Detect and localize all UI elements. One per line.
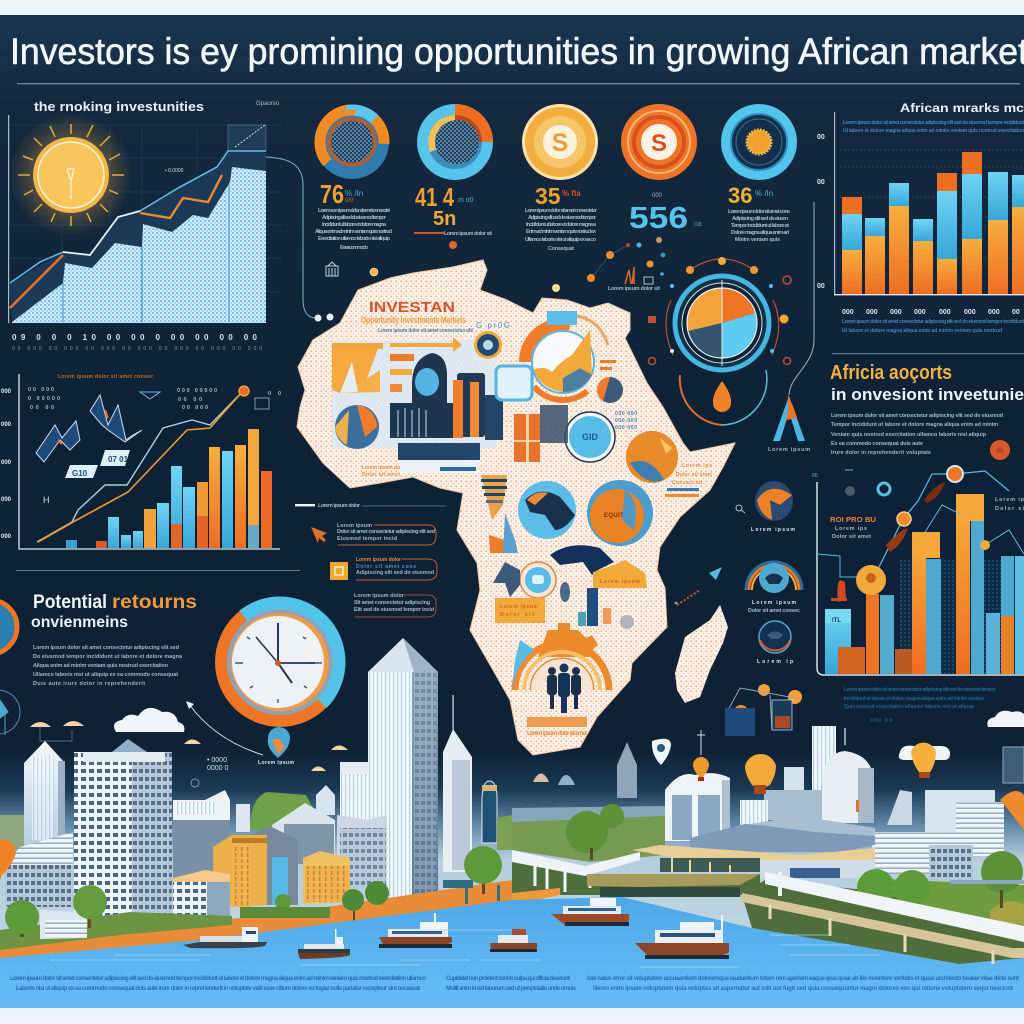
cross mark (697, 730, 705, 755)
icon: striped sphere (755, 481, 793, 521)
orange footer bars: Lorem ipsum dolor sit amet (527, 731, 587, 737)
ships (50, 898, 880, 967)
orange note: Dolor sit (500, 612, 534, 618)
panel: chart with growth bars: 00 00 (30, 405, 54, 411)
stat 556: 556 (629, 200, 688, 235)
stat 76: 76 (320, 179, 344, 209)
panel: donut stats: Consequat (548, 246, 574, 252)
list item 1: Lorem ipsum (337, 523, 372, 529)
panel: donut stats: Lorem ipsum dolor sit amet consectetur (525, 208, 598, 214)
orange arrow box: Lorem ipsum (600, 579, 641, 585)
tower a (24, 741, 65, 845)
hanging bulbs frame (725, 688, 795, 736)
panel: donut stats: % /In (345, 189, 363, 198)
orange world globe (587, 480, 653, 546)
orange note: Lorem ipsum (500, 604, 539, 610)
left bridge (512, 850, 760, 905)
glowing dot (370, 268, 378, 276)
orange arrow box (593, 560, 647, 588)
panel: donut stats: Adipiscing elit sed do eiusmod tempor (322, 215, 387, 221)
orange globe (626, 431, 678, 483)
list item 3: Elit sed do eiusmod tempor incid (354, 607, 434, 613)
text note east: 000 000 (615, 418, 637, 424)
list item 3: Sit amet consectetur adipiscing (354, 600, 430, 606)
list panel: Lorem ipsum dolor (318, 503, 361, 509)
small tower (316, 785, 335, 815)
continent (297, 260, 735, 755)
ship 5 (551, 898, 629, 926)
text note east: 000 000 (615, 411, 637, 417)
trend lines (10, 252, 63, 283)
domes (533, 774, 575, 785)
panel: donut stats: Lorem ipsum dolor sit amet cons (728, 209, 790, 215)
badge GID (565, 412, 615, 462)
panel: donut stats (307, 97, 797, 252)
column of small icons: Lorem ipsum (751, 527, 796, 533)
cloud left (114, 708, 184, 732)
list item 2 (330, 557, 437, 580)
tag labels: 07 01 (108, 455, 129, 464)
panel: chart with growth bars: 000 (1, 460, 12, 466)
footer text: Lorem ipsum dolor sit amet consectetur adipiscing elit sed do eiusmod tempor incididunt ut labore et dolore magna aliqua enim ad minim veniam quis nostrud exercitation ullamco (10, 976, 426, 982)
infographic canvas: Lorem ipsum (258, 760, 295, 766)
trees (566, 804, 624, 860)
icon: clipped ring (0, 600, 17, 654)
text block: Quis nostrud exercitation ullamco laboris nisi ut aliquip (844, 704, 974, 710)
panel: donut stats: 5n (433, 208, 456, 230)
panel: donut stats: % /In (755, 189, 773, 198)
ship 2 (298, 929, 350, 959)
cloud right (987, 711, 1024, 727)
panel: African markets bar chart: 00 (817, 179, 825, 186)
panel: donut stats: Lorem ipsum dolor sit (444, 231, 492, 237)
illustration: skyline silhouette (390, 403, 460, 438)
list item 2: Adipiscing elit sed do eiusmod (356, 570, 434, 576)
panel: African markets bar chart: Lorem ipsum dolor sit amet consectetur adipiscing elit sed do eiusmod tempor incididunt (842, 319, 1024, 325)
pennant (489, 513, 518, 553)
small label (191, 757, 229, 787)
footer text: Mollit anim id est laborum sed ut perspiciatis unde omnis (446, 986, 577, 992)
coin 4 (621, 104, 697, 180)
icon: globe small at right of map (736, 505, 745, 513)
low block left (5, 832, 73, 907)
side block (337, 762, 387, 888)
dark wedge (10, 151, 266, 322)
bars (842, 152, 1024, 294)
panel: chart with growth bars: 00 (268, 391, 281, 397)
Africa map: Opportunity Investments Markets (361, 315, 466, 325)
Africa map: Lorem ipsum do (362, 465, 400, 471)
icon: sun (9, 113, 133, 237)
panel: African markets bar chart: 000 (914, 309, 926, 316)
text block (844, 687, 996, 724)
text block: Lorem ipsum dolor sit amet consectetur adipiscing elit sed do eiusmod tempor (844, 687, 996, 693)
panel: chart with growth bars: 00 000 (28, 387, 54, 393)
rainbow with people (512, 623, 609, 713)
arrow head (186, 701, 194, 709)
panel: Africa reports text: 00 (997, 449, 1004, 455)
panel: African markets bar chart (817, 101, 1024, 334)
panel: African markets bar chart: 000 (842, 309, 854, 316)
scattered node dots: Lorem ipsum dolor sit (608, 286, 660, 292)
small pins (30, 721, 348, 771)
panel: African markets bar chart: 000 (890, 309, 902, 316)
drop icon (713, 381, 731, 412)
panel: donut stats: 0/0 (345, 198, 354, 204)
Africa map: Dolor sit amet (362, 472, 400, 478)
footer text: Laboris nisi ut aliquip ex ea commodo consequat duis aute irure dolor in reprehenderit in voluptate velit esse cillum dolore eu fugiat nulla pariatur excepteur sint occaecat (16, 986, 420, 992)
ring chart (509, 308, 617, 416)
list panel (295, 503, 446, 617)
blue block (252, 826, 298, 905)
ramp (742, 872, 1024, 964)
spire tower (443, 695, 472, 872)
panel: chart with growth bars: 000 (1, 534, 12, 540)
panel: donut stats: Incididunt ut labore et dolore magna (322, 222, 387, 228)
panel: chart with growth bars (1, 374, 281, 549)
panel: African markets bar chart: 000 (988, 309, 1000, 316)
panel: return bars framed chart: Lorem ip (995, 497, 1024, 503)
stat 556: oa (694, 221, 702, 228)
heading: Potential (33, 592, 107, 613)
pie (687, 280, 757, 366)
panel: return bars framed chart: 00 (812, 473, 818, 479)
footer text: Cupidatat non proident sunt in culpa qui officia deserunt (446, 976, 570, 982)
stat 41 4: 41 4 (415, 182, 454, 212)
ship 1 (183, 927, 267, 948)
network glyphs (36, 421, 80, 462)
panel: African markets bar chart: 000 (866, 309, 878, 316)
shield pin (652, 739, 671, 765)
dotted area (12, 167, 266, 323)
panel: chart with growth bars: 000 00000 (177, 388, 217, 394)
mini city (560, 582, 634, 629)
far right block (1003, 747, 1024, 783)
ship 6 (635, 915, 729, 959)
icon: small dots arrow (675, 567, 722, 605)
panel: donut stats: % fIa (562, 189, 581, 198)
panel: chart with growth bars: 00 000 (182, 405, 208, 411)
panel: Africa reports text: in onvesiont inveetunie (831, 385, 1024, 404)
panel: African markets bar chart: Lorem ipsum dolor sit amet consectetur adipiscing elit sed do eiusmod tempor incididunt (843, 120, 1024, 126)
green hill (250, 792, 325, 830)
panel: donut stats: Dolore magna aliqua enim ad (731, 230, 789, 236)
capsule icon (597, 377, 623, 403)
axis (19, 374, 280, 549)
icon: dark circle (759, 621, 791, 653)
text block: Incididunt ut labore et dolore magna aliqua enim ad minim veniam (844, 696, 985, 702)
text note far east (665, 463, 712, 497)
panel: potential returns: Ullamco laboris nisi ut aliquip ex ea commodo consequat (33, 672, 178, 678)
chart title: African mrarks mc (900, 101, 1024, 115)
ship 3 (379, 913, 452, 948)
grey block (272, 803, 335, 864)
coin 4: S (651, 130, 667, 157)
icon: camera ring (474, 331, 502, 359)
lower arc (680, 375, 722, 425)
station roofs (632, 816, 875, 878)
list item 1 (311, 523, 436, 545)
panel: donut stats: Adipiscing elit sed do eiusmod tempor (528, 215, 597, 221)
column of small icons (746, 481, 802, 665)
land (0, 880, 512, 960)
panel: donut stats: Adipiscing elit sed do eiusm (732, 216, 788, 222)
column of small icons: Lorem ip (757, 659, 793, 665)
dark blob (550, 545, 614, 575)
small label: • 0000 (207, 757, 227, 764)
scattered node dots (552, 237, 666, 292)
white building (665, 773, 730, 841)
orange tower (514, 405, 568, 462)
panel: African markets bar chart: 000 (964, 309, 976, 316)
panel: African markets bar chart: 00 (817, 283, 825, 290)
dark polygon (493, 562, 520, 597)
donut 2 (417, 104, 493, 180)
trees (5, 846, 502, 937)
panel: African markets bar chart: 000 (939, 309, 951, 316)
orange block (213, 835, 267, 908)
badge GID: GID (582, 432, 598, 442)
panel: potential returns: Do eiusmod tempor incididunt ut labore et dolore magna (33, 654, 183, 660)
white block (40, 910, 87, 939)
panel: Africa reports text: Irure dolor in reprehenderit voluptate (831, 450, 931, 456)
panel: opportunities area chart: • 0.0000 (165, 168, 184, 174)
Africa map: G pr0G (476, 321, 510, 330)
footer text: Nemo enim ipsam voluptatem quia voluptas sit aspernatur aut odit aut fugit sed quia consequuntur magni dolores eos qui ratione voluptatem sequi nesciunt (593, 986, 1013, 992)
panel: chart with growth bars: 000 (1, 389, 12, 395)
list item 2: Lorem ipsum dolor (356, 557, 401, 563)
panel: potential returns: Aliqua enim ad minim veniam quis nostrud exercitation (33, 663, 168, 669)
main tower (368, 638, 438, 902)
stat 35: 35 (535, 183, 561, 209)
bulbs (693, 684, 1024, 830)
right green strip (950, 880, 1024, 884)
panel: donut stats: Minim veniam quis (735, 237, 780, 243)
list item 3: Lorem ipsum dolor (354, 593, 405, 599)
panel: opportunities area chart: 00 000 00 000 00 000 00 000 00 000 00 000 00 000 (12, 346, 262, 352)
bars (66, 429, 272, 548)
list item 3 (354, 593, 436, 617)
panel: Africa reports text: Tempor incididunt ut labore et dolore magna aliqua enim ad minim (831, 422, 998, 428)
orange note (495, 598, 545, 623)
panel: opportunities area chart (8, 100, 282, 352)
trees right (857, 851, 1023, 908)
text note far east: Dolor sit amet (676, 472, 712, 478)
panel: donut stats: Incididunt ut labore et dolore magna a (526, 222, 597, 228)
list item 2: Dolor sit amet cons (356, 564, 416, 570)
heading: Africia aoçorts (830, 362, 952, 384)
panel: donut stats: Lorem sum ipsum dolor sit amet consectet (318, 208, 390, 214)
panel: African markets bar chart: Ut labore et dolore magna aliqua enim ad minim veniam quis nostrud exercitation (843, 128, 1024, 134)
labels: ROI PRO BU (830, 517, 876, 524)
body: Lorem ipsum dolor sit amet consectetur adipiscing elit sed (33, 645, 179, 651)
capsule tower (482, 781, 497, 843)
fields (512, 815, 665, 862)
stat 36: 36 (728, 183, 752, 208)
panel: chart with growth bars: 00 00 (178, 397, 202, 403)
panel: return bars framed chart (812, 466, 1024, 675)
column of small icons: Dolor sit amet consec (748, 608, 800, 614)
text note east: 000 000 (615, 425, 637, 431)
panel: donut stats: Ullamco laboris nisi ut aliquip ex ea co (525, 237, 597, 243)
icon: rainbow (746, 562, 802, 593)
column of small icons: Lorem ipsum (752, 600, 797, 606)
panel: donut stats: Ex ea commodo (340, 245, 369, 251)
Africa map: Lorem ipsum dolor sit amet consectetur elit (378, 328, 473, 334)
panel: Africa reports text (830, 353, 1024, 460)
inset box (228, 125, 266, 151)
illustration: city block (332, 340, 497, 448)
icon: clock (197, 579, 363, 745)
callout card (496, 366, 532, 400)
mid towers (764, 726, 874, 823)
illustration: bars (390, 343, 453, 347)
body: Lorem ipsum dolor sit amet consectetur adipiscing elit sed do eiusmod (831, 413, 1003, 419)
water (0, 897, 1024, 1008)
panel: Africa reports text: Veniam quis nostrud exercitation ullamco laboris nisi aliquip (831, 432, 987, 438)
panel: potential returns: onvienmeins (31, 614, 128, 631)
connector dots (314, 314, 334, 322)
spire building (617, 742, 637, 798)
heading: the rnoking investunities (34, 100, 204, 114)
balloon left (0, 840, 16, 880)
trend lines (37, 391, 243, 542)
panel: donut stats: m o0 (458, 197, 474, 204)
panel: return bars framed chart: ITL (832, 618, 841, 624)
stat 556: 000 (652, 193, 663, 199)
panel: return bars framed chart: Lorem ips (835, 526, 867, 532)
orange footer bars (527, 717, 587, 737)
footer text: Iste natus error sit voluptatem accusantium doloremque laudantium totam rem aperiam eaque ipsa quae ab illo inventore veritatis et quasi architecto beatae vitae dicta sunt (587, 976, 1019, 982)
ship 4 (490, 929, 537, 952)
panel: potential returns: Duis aute irure dolor in reprehenderit (33, 681, 145, 687)
coin 3: S (552, 129, 568, 157)
Madagascar (675, 605, 728, 703)
hat of block (112, 739, 147, 752)
arrow to droplet (189, 704, 263, 755)
panel: donut stats: Aliqua enim ad minim veniam quis nostrud (315, 229, 392, 235)
striped funnel (481, 475, 507, 520)
axis labels: 09 0 0 0 10 00 00 0 00 00 00 00 (12, 333, 258, 342)
panel: African markets bar chart: 00 (1012, 309, 1020, 316)
bars (825, 494, 1024, 674)
footer text (10, 976, 1019, 992)
panel: chart with growth bars: Lorem ipsum dolor sit amet consec (58, 374, 153, 380)
nodes (856, 565, 886, 595)
panel: return bars framed chart: Dolor sit amet (832, 534, 871, 540)
text note far east: Consect ad (672, 480, 702, 486)
panel: African markets bar chart: 00 (817, 134, 825, 141)
list item 1: Dolor sit amet consectetur adipiscing elit sed (337, 529, 435, 535)
panel: gauge (648, 257, 791, 425)
gauge ring (675, 276, 769, 370)
list item 1: Eiusmod tempor incid (337, 536, 397, 542)
big building (74, 752, 172, 930)
panel: chart with growth bars: 000 (1, 422, 12, 428)
icon: clipped globe (0, 690, 20, 735)
panel: African markets bar chart: Ut labore et dolore magna aliqua enim ad minim veniam quis nostrud (842, 328, 1002, 334)
badge small (520, 562, 556, 598)
panel: chart with growth bars: G10 (72, 469, 88, 478)
droplet pin (268, 727, 290, 758)
illustration: text plates (398, 443, 480, 460)
panel: potential returns: retourns (112, 592, 197, 613)
text block: 000 00 (870, 718, 892, 724)
text note far east: Lorem ips (682, 463, 712, 469)
stat 556 (629, 193, 702, 235)
panel: chart with growth bars: H (43, 495, 50, 505)
icon: sun dial (721, 104, 797, 180)
right buildings (872, 790, 1023, 906)
right land (742, 880, 1024, 964)
blue dock (443, 880, 500, 904)
coin 3 (522, 104, 598, 180)
panel: chart with growth bars: 0 00000 (28, 396, 60, 402)
panel: donut stats: Tempor incididunt ut labore et (731, 223, 789, 229)
roofed building (173, 870, 230, 918)
donut 1 (307, 97, 397, 187)
panel: donut stats: Enim ad minim veniam quis nostrud ex (526, 229, 596, 235)
icon: spire (768, 395, 810, 453)
panel: potential returns (31, 592, 197, 687)
orange world globe: EQUITY (604, 513, 628, 519)
text note east (615, 411, 637, 431)
yellow block (303, 851, 350, 904)
icon: spire: Lorem ipsum (768, 447, 810, 453)
map heading: INVESTAN (369, 299, 455, 316)
panel: donut stats: Exercitation ullamco laboris nisi aliquip (318, 236, 391, 242)
network lines (817, 554, 858, 577)
cityscape right (0, 684, 1024, 1008)
icon: building (326, 262, 338, 276)
cityscape left (0, 638, 512, 960)
Africa map (297, 260, 735, 755)
tag labels (100, 450, 130, 466)
panel: opportunities area chart: Gpaorso (256, 101, 280, 107)
panel: chart with growth bars: 000 (1, 497, 12, 503)
blue globe (518, 481, 576, 539)
panel: Africa reports text: Ex ea commodo consequat duis aute (831, 441, 923, 447)
connector line (266, 157, 316, 318)
mid grey building (173, 790, 230, 880)
small label: 0000 0 (207, 765, 229, 772)
connector to spire (789, 202, 814, 395)
panel: return bars framed chart: Dolor si (995, 506, 1024, 512)
